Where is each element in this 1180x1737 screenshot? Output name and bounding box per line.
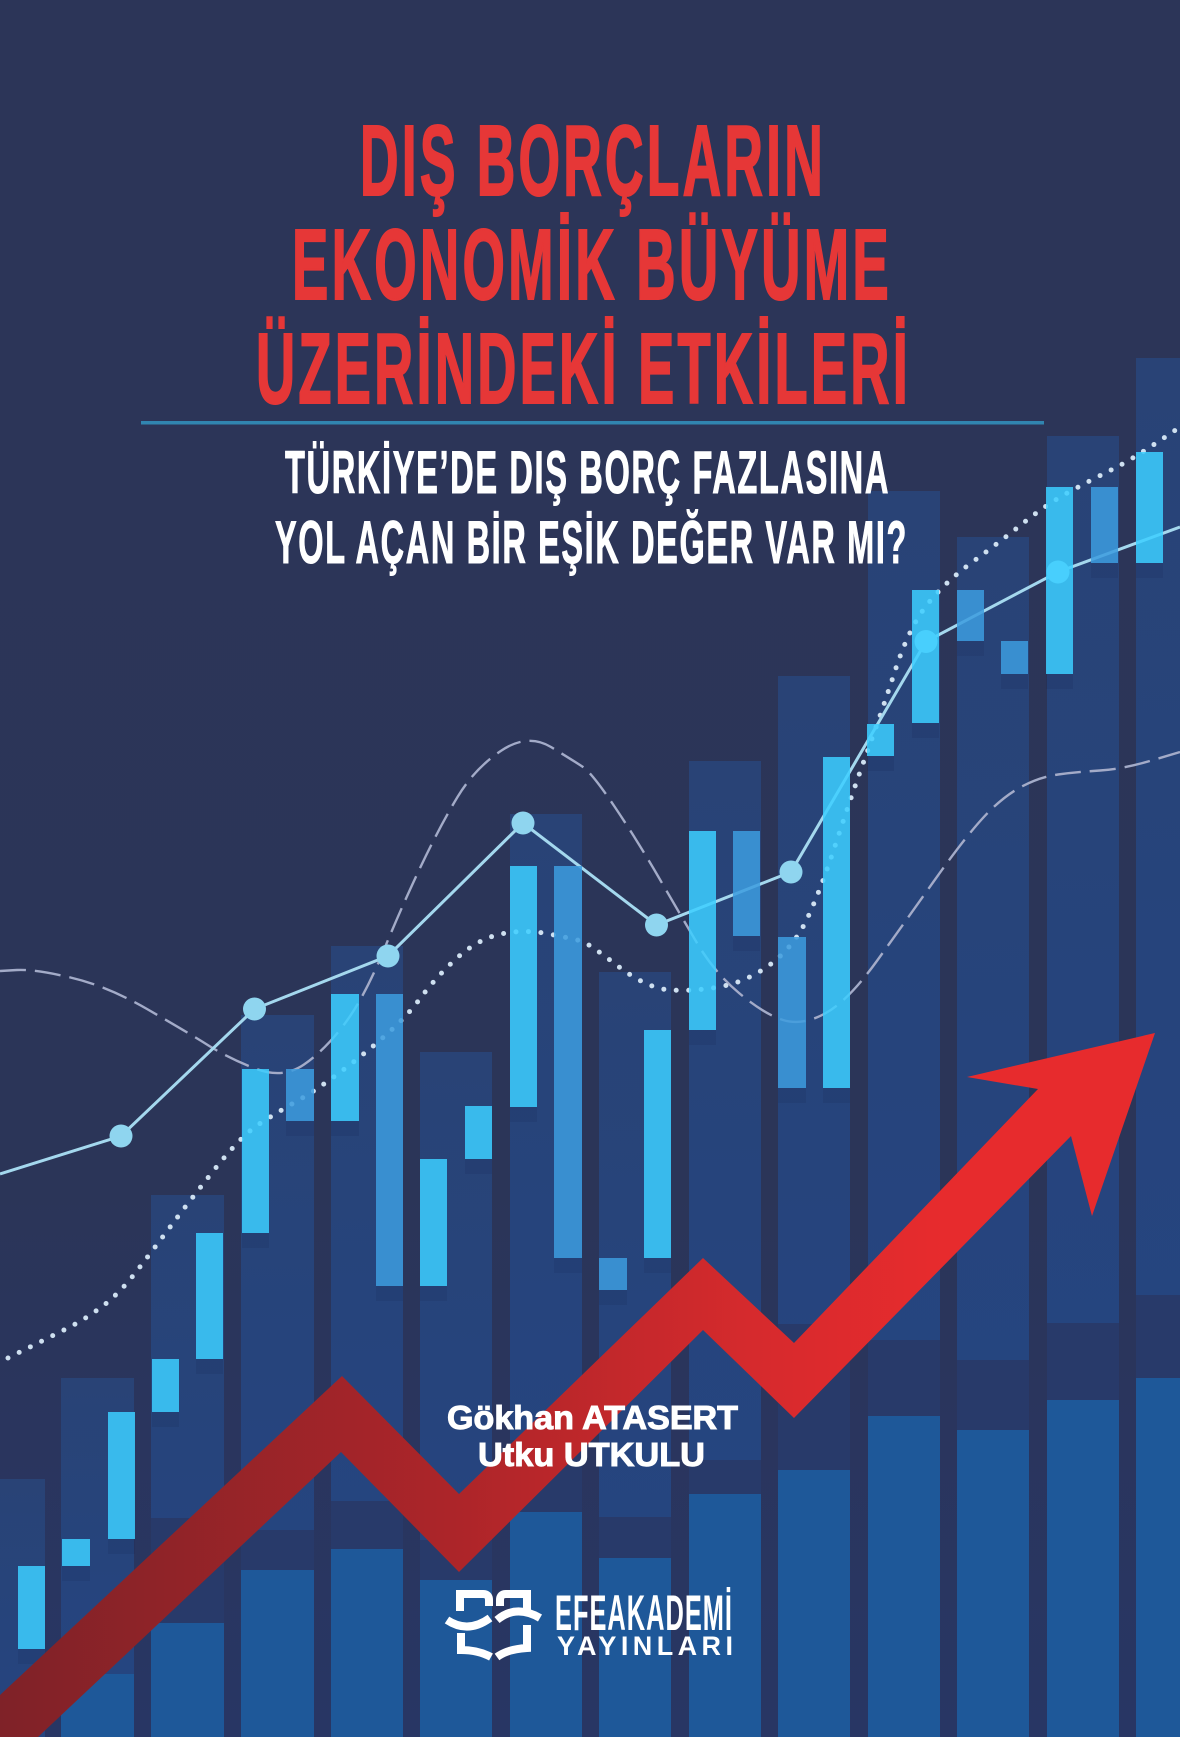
publisher name [555,1585,733,1661]
authors [447,1399,738,1473]
icon: publisher logo [447,1594,540,1657]
chart: bright candles [18,452,1163,1649]
chart: dotted trend line [8,427,1180,1358]
authors: Utku UTKULU [478,1436,705,1473]
chart: darker column segments above bright bases [151,1295,1180,1623]
chart: mid-blue candles [286,487,1118,1290]
authors: Gökhan ATASERT [447,1399,738,1436]
chart: dashed trend line [0,741,1180,1073]
publisher name: EFEAKADEMİ [555,1585,733,1641]
chart: solid line with markers [0,527,1180,1174]
chart: upper dark columns [0,358,1180,1737]
publisher name: YAYINLARI [557,1631,733,1661]
title [256,105,911,425]
chart: lower bright columns [61,1378,1180,1737]
title divider [141,421,1044,424]
subtitle [275,439,908,576]
arrow: red rising arrow [0,1033,1155,1737]
chart: candle shadows [18,563,1163,1664]
